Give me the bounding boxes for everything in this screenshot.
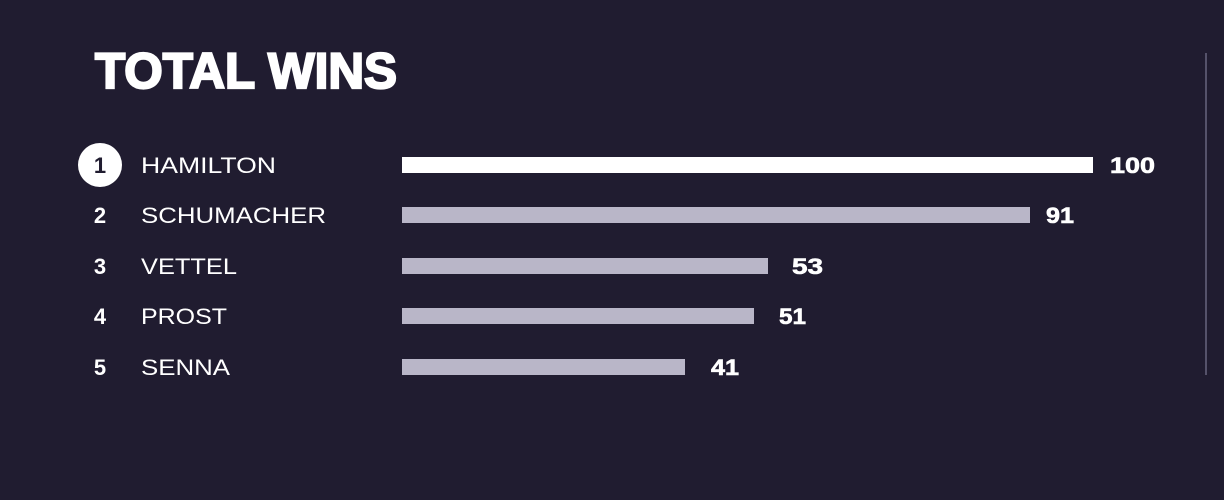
row 5: Senna: 5: [94, 355, 106, 380]
row 3: Vettel: VETTEL: [141, 254, 237, 279]
row 4: Prost: PROST: [141, 304, 227, 329]
row 1: Hamilton: HAMILTON: [141, 153, 276, 178]
row 4: Prost: [94, 304, 806, 329]
row 2: Schumacher: 2: [94, 203, 106, 228]
row 4: Prost: 4: [94, 304, 107, 329]
row 1: Hamilton: 100: [1110, 153, 1155, 178]
row 5: Senna: 41: [711, 355, 739, 380]
row 1: Hamilton: [78, 143, 1155, 187]
bar chart: [78, 143, 1155, 380]
row 5: Senna: [94, 355, 739, 380]
title: TOTAL WINS: [95, 43, 397, 99]
row 2: Schumacher: [94, 203, 1074, 228]
row 4: Prost: 51: [779, 304, 806, 329]
row 3: Vettel: 53: [792, 254, 823, 279]
row 5: Senna: SENNA: [141, 355, 230, 380]
row 1: Hamilton: 1: [94, 153, 106, 178]
row 3: Vettel: 3: [94, 254, 106, 279]
row 2: Schumacher: SCHUMACHER: [141, 203, 326, 228]
row 3: Vettel: [94, 254, 823, 279]
row 2: Schumacher: 91: [1046, 203, 1074, 228]
